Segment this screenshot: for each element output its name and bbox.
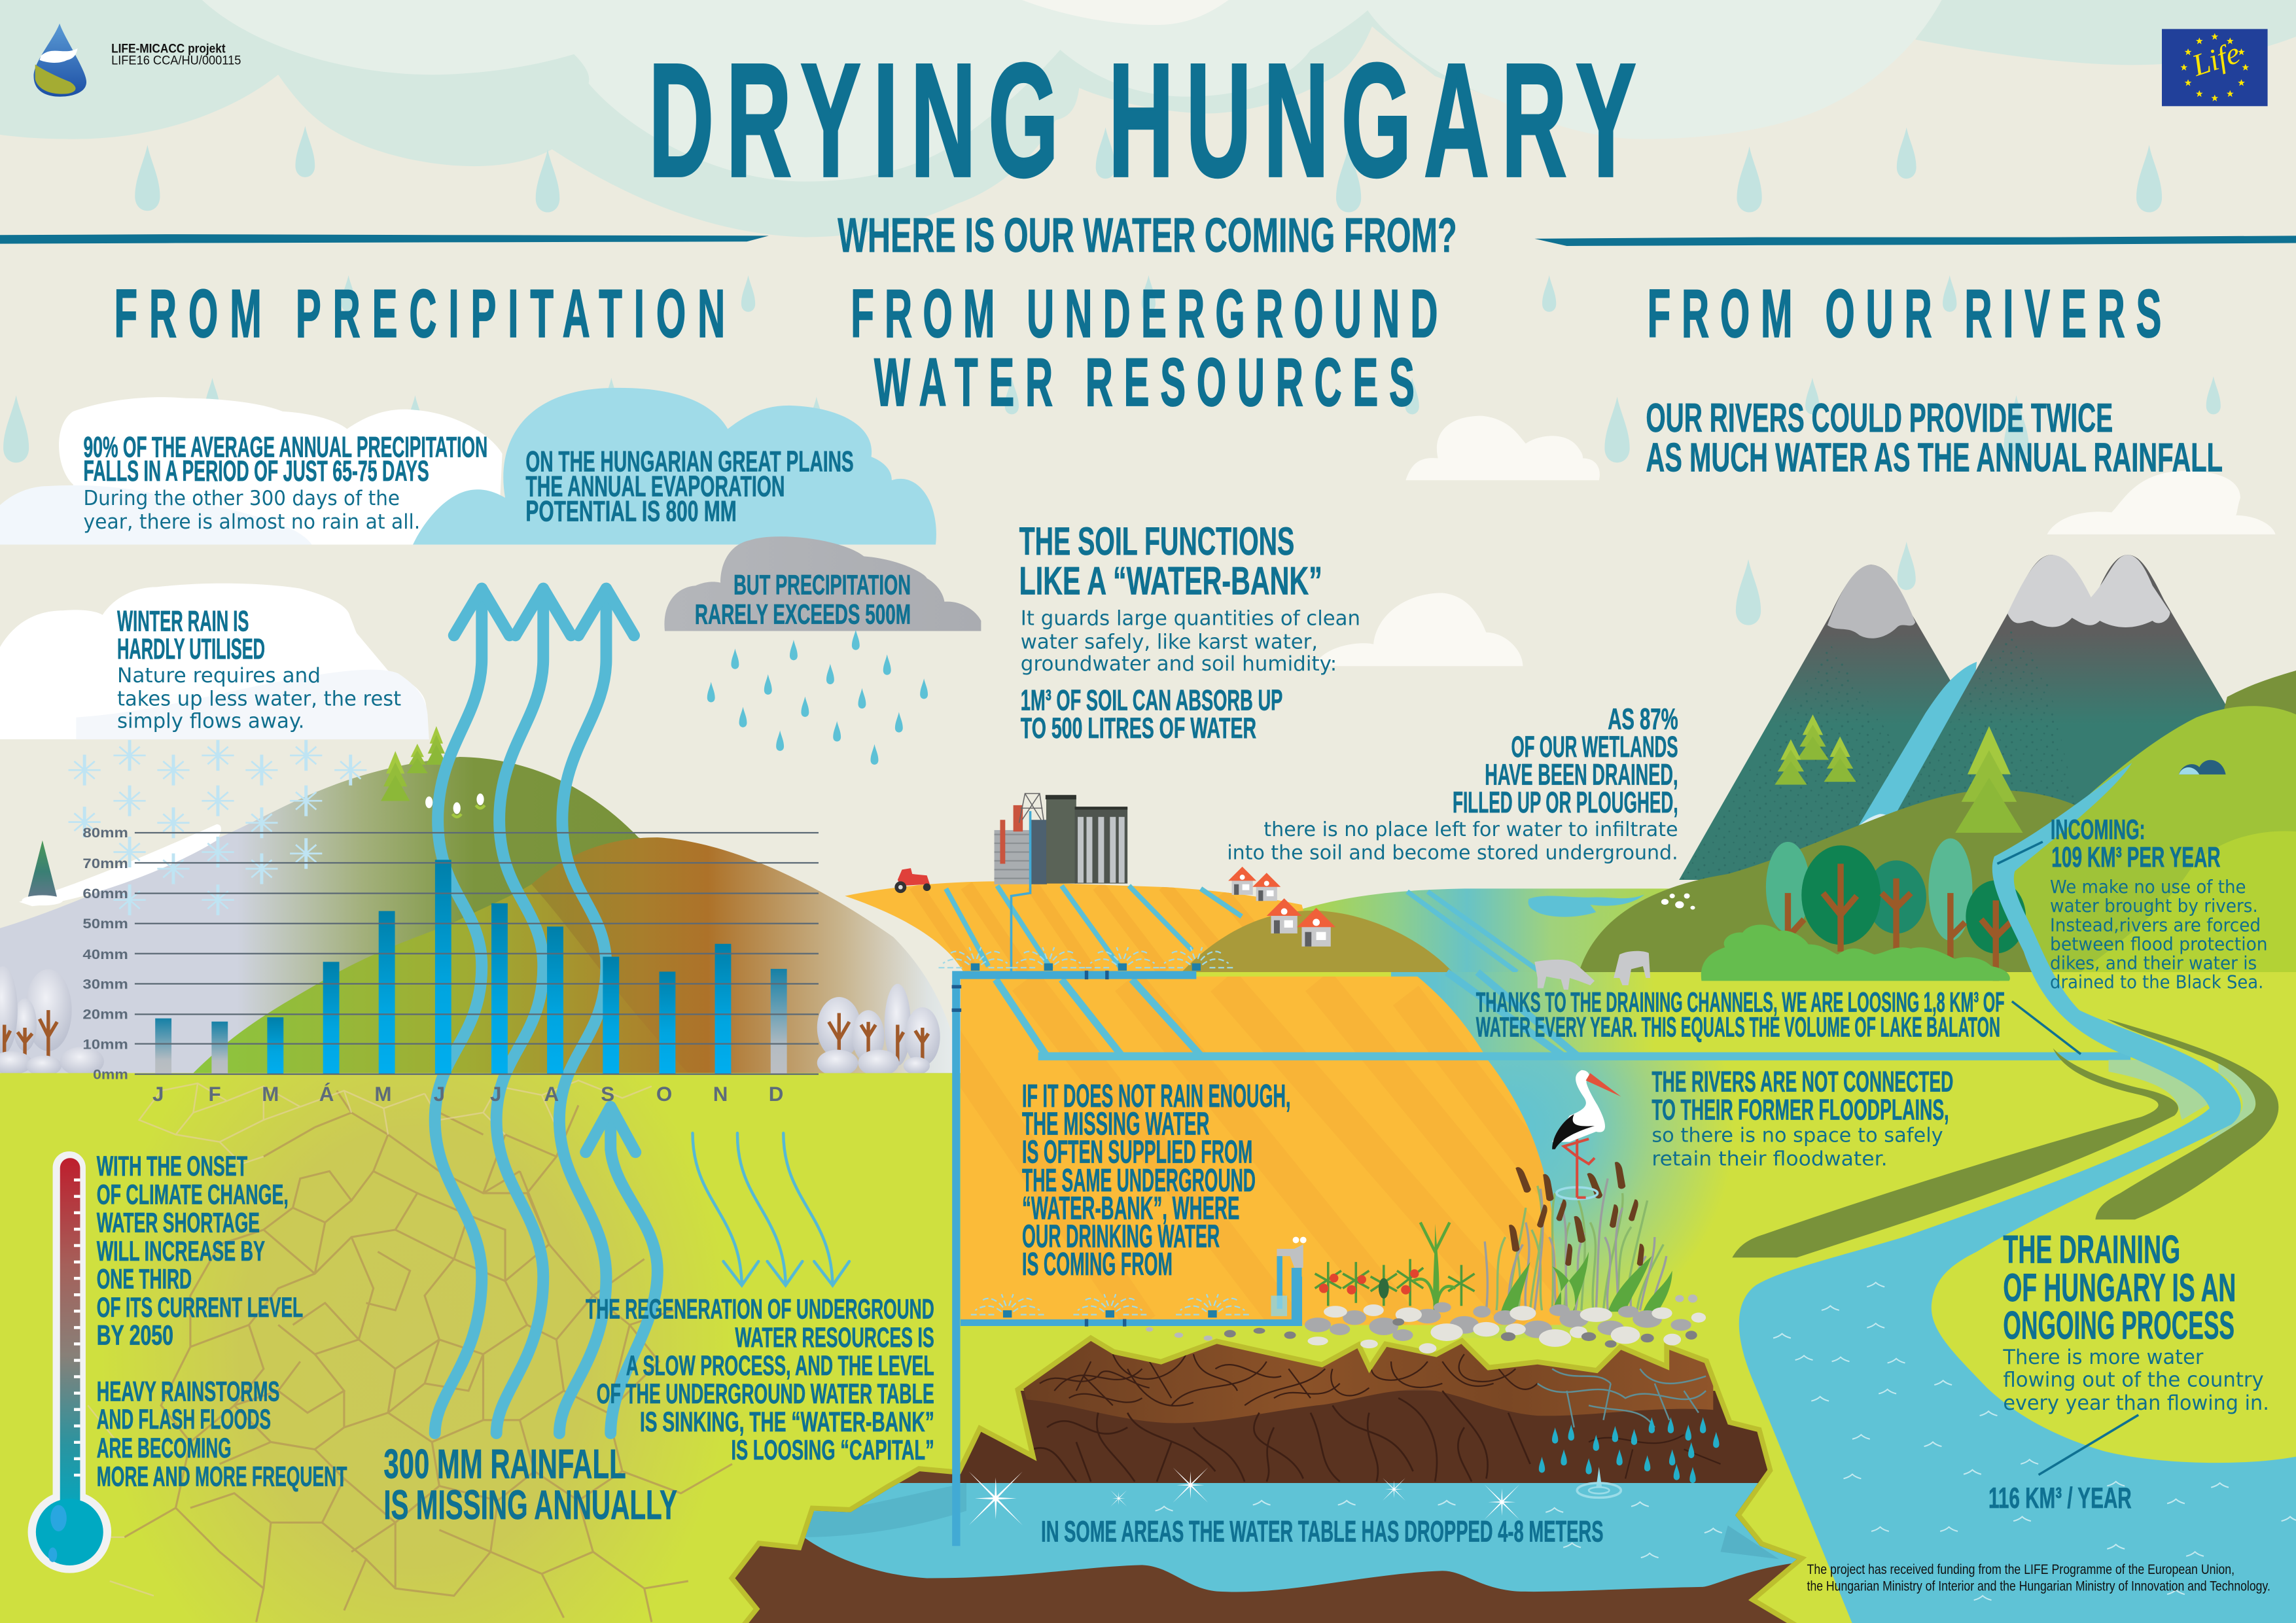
- cloud panel: evaporation: POTENTIAL IS 800 MM: [525, 495, 737, 528]
- upper orange field: [845, 881, 1318, 972]
- cloud panel: evaporation: ON THE HUNGARIAN GREAT PLAINS: [525, 445, 854, 478]
- irrigation pipes and sprinklers: [937, 947, 1299, 1546]
- text: wetlands drained: FILLED UP OR PLOUGHED,: [1453, 785, 1678, 819]
- cloud panel: precipitation rarely exceeds: RARELY EXCEEDS 500M: [695, 599, 911, 630]
- cloud panel: winter rain: WINTER RAIN IS: [117, 605, 249, 638]
- icons: white flowers on hill: [1661, 894, 1695, 909]
- infiltration arrows: [693, 1133, 849, 1285]
- cloud panel: precipitation rarely exceeds: [664, 536, 981, 631]
- text: rivers not connected: [1651, 1066, 1953, 1170]
- cloud panel: 90 percent precipitation: During the other 300 days of the: [84, 487, 400, 510]
- cloud panel: 90 percent precipitation: [0, 397, 503, 545]
- icon: white stork: [1552, 1070, 1621, 1199]
- river ripples: [1773, 1282, 2296, 1600]
- floodplain and river: [1732, 763, 2296, 1623]
- text: incoming 109 km3: Instead,rivers are forced: [2050, 914, 2261, 935]
- chart month labels: S: [601, 1083, 614, 1106]
- ground lime: [0, 972, 2296, 1623]
- funding note: [1807, 1562, 2270, 1594]
- main title: DRYING HUNGARY: [648, 30, 1636, 211]
- text: draining channels: [1476, 987, 2005, 1043]
- winter landscape hills: [0, 757, 961, 1073]
- text: missing water supplied from water bank: THE MISSING WATER: [1022, 1106, 1209, 1142]
- cloud panel: winter rain: simply flows away.: [117, 709, 304, 733]
- text: draining of Hungary: [2002, 1227, 2269, 1415]
- text: incoming 109 km3: water brought by rivers.: [2050, 895, 2258, 916]
- text: missing water supplied from water bank: IS OFTEN SUPPLIED FROM: [1022, 1134, 1252, 1170]
- water ripples underground: [1156, 1501, 1722, 1558]
- text: missing water supplied from water bank: THE SAME UNDERGROUND: [1022, 1162, 1256, 1198]
- text: incoming 109 km3: drained to the Black Sea.: [2050, 971, 2263, 993]
- chart y axis labels: 30mm: [82, 977, 128, 992]
- text: regeneration of underground water: OF THE UNDERGROUND WATER TABLE: [597, 1379, 934, 1410]
- chart month labels: D: [769, 1083, 783, 1106]
- text: climate change: ONE THIRD: [97, 1264, 192, 1295]
- text: climate change: BY 2050: [97, 1321, 173, 1352]
- text: wetlands drained: [1227, 702, 1678, 865]
- chart month labels: M: [374, 1083, 391, 1106]
- underground cross-section: [732, 1340, 1816, 1623]
- chart month labels: [152, 1083, 783, 1106]
- text: draining of Hungary: THE DRAINING: [2003, 1227, 2180, 1271]
- icon: factory: [995, 794, 1127, 972]
- text: incoming 109 km3: between flood protection: [2050, 933, 2268, 954]
- chart month labels: J: [434, 1083, 445, 1106]
- rain drops under cloud: [707, 629, 928, 765]
- right hills: [1578, 671, 2296, 973]
- heading: from underground water resources: WATER RESOURCES: [874, 344, 1415, 420]
- text: regeneration of underground water: IS SINKING, THE “WATER-BANK”: [640, 1407, 934, 1438]
- text: regeneration of underground water: THE REGENERATION OF UNDERGROUND: [586, 1295, 934, 1325]
- text: climate change: WATER SHORTAGE: [97, 1208, 260, 1239]
- text: wetlands drained: AS 87%: [1608, 702, 1678, 736]
- logo: LIFE-MICACC: LIFE16 CCA/HU/000115: [111, 54, 241, 68]
- text: climate change: WITH THE ONSET: [97, 1151, 247, 1182]
- callout line: outflow: [2039, 1415, 2138, 1475]
- icons: vegetables: [1315, 1223, 1475, 1312]
- text: missing water supplied from water bank: OUR DRINKING WATER: [1022, 1219, 1220, 1255]
- text: heavy rainstorms: ARE BECOMING: [97, 1433, 232, 1464]
- chart month labels: J: [152, 1083, 164, 1106]
- callout line: draining channels: [2012, 1002, 2081, 1054]
- chart bars: [155, 860, 787, 1074]
- text: wetlands drained: into the soil and become stored underground.: [1227, 842, 1678, 865]
- icon: pine on snowy hill: [22, 841, 63, 905]
- cloud panel: winter rain: HARDLY UTILISED: [117, 633, 265, 665]
- callout line: incoming: [1997, 842, 2043, 864]
- text: missing water supplied from water bank: IS COMING FROM: [1022, 1246, 1173, 1282]
- text: missing water supplied from water bank: [1022, 1078, 1290, 1282]
- icons: mountain pines: [1775, 714, 2023, 833]
- text: incoming 109 km3: INCOMING:: [2051, 814, 2145, 845]
- text: climate change: WILL INCREASE BY: [97, 1236, 265, 1267]
- text: 300 mm rainfall missing: 300 MM RAINFALL: [383, 1441, 626, 1487]
- rainfall bar chart: [82, 825, 819, 1106]
- reeds and cattails: [1485, 1161, 1672, 1312]
- cloud panel: 90 percent precipitation: FALLS IN A PERIOD OF JUST 65-75 DAYS: [84, 455, 429, 487]
- text: incoming 109 km3: We make no use of the: [2050, 876, 2246, 898]
- chart y axis labels: 40mm: [82, 947, 128, 962]
- cloud panel: winter rain: Nature requires and: [117, 664, 321, 688]
- mountains: [1679, 555, 2227, 880]
- icon: tap and glass: [1271, 1237, 1307, 1323]
- chart y axis labels: 80mm: [82, 825, 128, 841]
- chart y axis labels: 20mm: [82, 1007, 128, 1022]
- text: draining of Hungary: There is more water: [2002, 1346, 2203, 1369]
- stones: [1146, 1295, 1706, 1353]
- text: soil water bank: 1M³ OF SOIL CAN ABSORB UP: [1021, 684, 1282, 716]
- evaporation arrows: [435, 589, 658, 1433]
- text: 116 km3 per year: 116 KM³ / YEAR: [1988, 1482, 2132, 1514]
- text: regeneration of underground water: WATER RESOURCES IS: [735, 1323, 934, 1353]
- text: regeneration of underground water: [586, 1295, 934, 1466]
- chart y axis labels: 50mm: [82, 916, 128, 932]
- text: soil water bank: TO 500 LITRES OF WATER: [1021, 712, 1256, 744]
- text: climate change: [97, 1151, 303, 1352]
- background small clouds: [1313, 416, 2276, 666]
- text: 300 mm rainfall missing: [383, 1441, 677, 1528]
- chart month labels: J: [490, 1083, 501, 1106]
- text: water table dropped: IN SOME AREAS THE WATER TABLE HAS DROPPED 4-8 METERS: [1041, 1514, 1603, 1548]
- thermometer: [28, 1151, 111, 1573]
- text: wetlands drained: OF OUR WETLANDS: [1511, 729, 1678, 763]
- logo: LIFE-MICACC: [33, 24, 241, 97]
- background raindrops: [3, 126, 2221, 625]
- text: rivers not connected: THE RIVERS ARE NOT CONNECTED: [1651, 1066, 1953, 1098]
- text: draining of Hungary: flowing out of the country: [2003, 1368, 2264, 1391]
- icons: winter trees right: [817, 984, 940, 1076]
- subtitle: WHERE IS OUR WATER COMING FROM?: [838, 208, 1457, 262]
- text: rivers not connected: retain their floodwater.: [1651, 1147, 1888, 1170]
- heading: from our rivers: FROM OUR RIVERS: [1648, 275, 2161, 351]
- chart y axis labels: 10mm: [82, 1036, 128, 1052]
- text: soil water bank: groundwater and soil humidity:: [1021, 652, 1337, 676]
- text: heavy rainstorms: HEAVY RAINSTORMS: [97, 1377, 279, 1408]
- snowflakes: [69, 740, 366, 915]
- text: 300 mm rainfall missing: IS MISSING ANNUALLY: [383, 1482, 677, 1528]
- cloud panel: 90 percent precipitation: year, there is almost no rain at all.: [84, 510, 420, 534]
- chart y axis labels: 0mm: [93, 1066, 128, 1082]
- sparkles: [969, 1467, 1519, 1526]
- cloud panel: winter rain: takes up less water, the rest: [117, 688, 401, 711]
- text: incoming 109 km3: [2050, 814, 2268, 993]
- underground droplets and spring: [1539, 1417, 1719, 1497]
- chart month labels: M: [262, 1083, 279, 1106]
- cloud panel: 90 percent precipitation: 90% OF THE AVERAGE ANNUAL PRECIPITATION: [84, 430, 487, 463]
- icons: winter trees left: [0, 966, 104, 1076]
- lower orange field: [937, 977, 1596, 1325]
- text: wetlands drained: there is no place left for water to infiltrate: [1263, 818, 1678, 841]
- text: incoming 109 km3: dikes, and their water is: [2050, 952, 2257, 974]
- lake and wetland channels: [1407, 892, 1644, 972]
- text: climate change: OF ITS CURRENT LEVEL: [97, 1293, 303, 1323]
- text: missing water supplied from water bank: “WATER-BANK”, WHERE: [1022, 1190, 1239, 1226]
- heading: from underground water resources: FROM UNDERGROUND: [851, 275, 1438, 351]
- text: wetlands drained: HAVE BEEN DRAINED,: [1485, 758, 1678, 792]
- text: regeneration of underground water: IS LOOSING “CAPITAL”: [731, 1435, 934, 1466]
- text: heavy rainstorms: AND FLASH FLOODS: [97, 1405, 271, 1435]
- cloud panel: precipitation rarely exceeds: BUT PRECIPITATION: [733, 570, 911, 601]
- text: soil water bank: It guards large quantities of clean: [1021, 607, 1360, 631]
- text: climate change: OF CLIMATE CHANGE,: [97, 1180, 289, 1211]
- heading: from precipitation: FROM PRECIPITATION: [115, 275, 725, 351]
- text: rivers not connected: TO THEIR FORMER FLOODPLAINS,: [1651, 1093, 1949, 1126]
- icon: red tractor: [894, 868, 930, 893]
- cloud panel: evaporation: THE ANNUAL EVAPORATION: [525, 470, 785, 503]
- green band beyond field: [1288, 888, 1757, 973]
- text: draining of Hungary: every year than flowing in.: [2003, 1391, 2269, 1415]
- top clouds: [0, 0, 2296, 237]
- icons: pines and tulips on hill: [381, 726, 485, 817]
- logo: EU LIFE flag: [2162, 29, 2268, 106]
- icons: grazing cattle: [1534, 951, 1650, 990]
- text: soil water bank: [1019, 519, 1360, 744]
- chart month labels: A: [544, 1083, 559, 1106]
- chart month labels: N: [713, 1083, 728, 1106]
- text: soil water bank: THE SOIL FUNCTIONS: [1019, 519, 1294, 563]
- chart y axis labels: 70mm: [82, 856, 128, 871]
- divider stripes: [0, 234, 769, 244]
- text: soil water bank: water safely, like karst water,: [1021, 630, 1318, 654]
- drainage channels: [996, 972, 2130, 1056]
- text: regeneration of underground water: A SLOW PROCESS, AND THE LEVEL: [626, 1351, 934, 1382]
- river statement: [1646, 396, 2223, 481]
- chart y axis labels: 60mm: [82, 886, 128, 901]
- dry land cracks: [80, 1081, 732, 1622]
- cloud panel: winter rain: [0, 584, 429, 739]
- trees group: [1701, 838, 2026, 981]
- logo: LIFE-MICACC: LIFE-MICACC projekt: [111, 43, 226, 56]
- logo: EU LIFE flag: Life: [2187, 36, 2244, 83]
- heading: from underground water resources: [851, 275, 1438, 420]
- chart y axis labels: [82, 825, 128, 1082]
- text: heavy rainstorms: MORE AND MORE FREQUENT: [97, 1461, 347, 1492]
- text: rivers not connected: so there is no space to safely: [1651, 1125, 1943, 1147]
- chart month labels: F: [209, 1083, 221, 1106]
- text: missing water supplied from water bank: IF IT DOES NOT RAIN ENOUGH,: [1022, 1078, 1290, 1114]
- text: heavy rainstorms: [97, 1377, 347, 1492]
- text: soil water bank: LIKE A “WATER-BANK”: [1019, 559, 1322, 603]
- chart month labels: O: [656, 1083, 672, 1106]
- cloud panel: evaporation: [413, 388, 936, 545]
- chart month labels: Á: [319, 1083, 334, 1106]
- olive hill with houses: [1182, 867, 1453, 972]
